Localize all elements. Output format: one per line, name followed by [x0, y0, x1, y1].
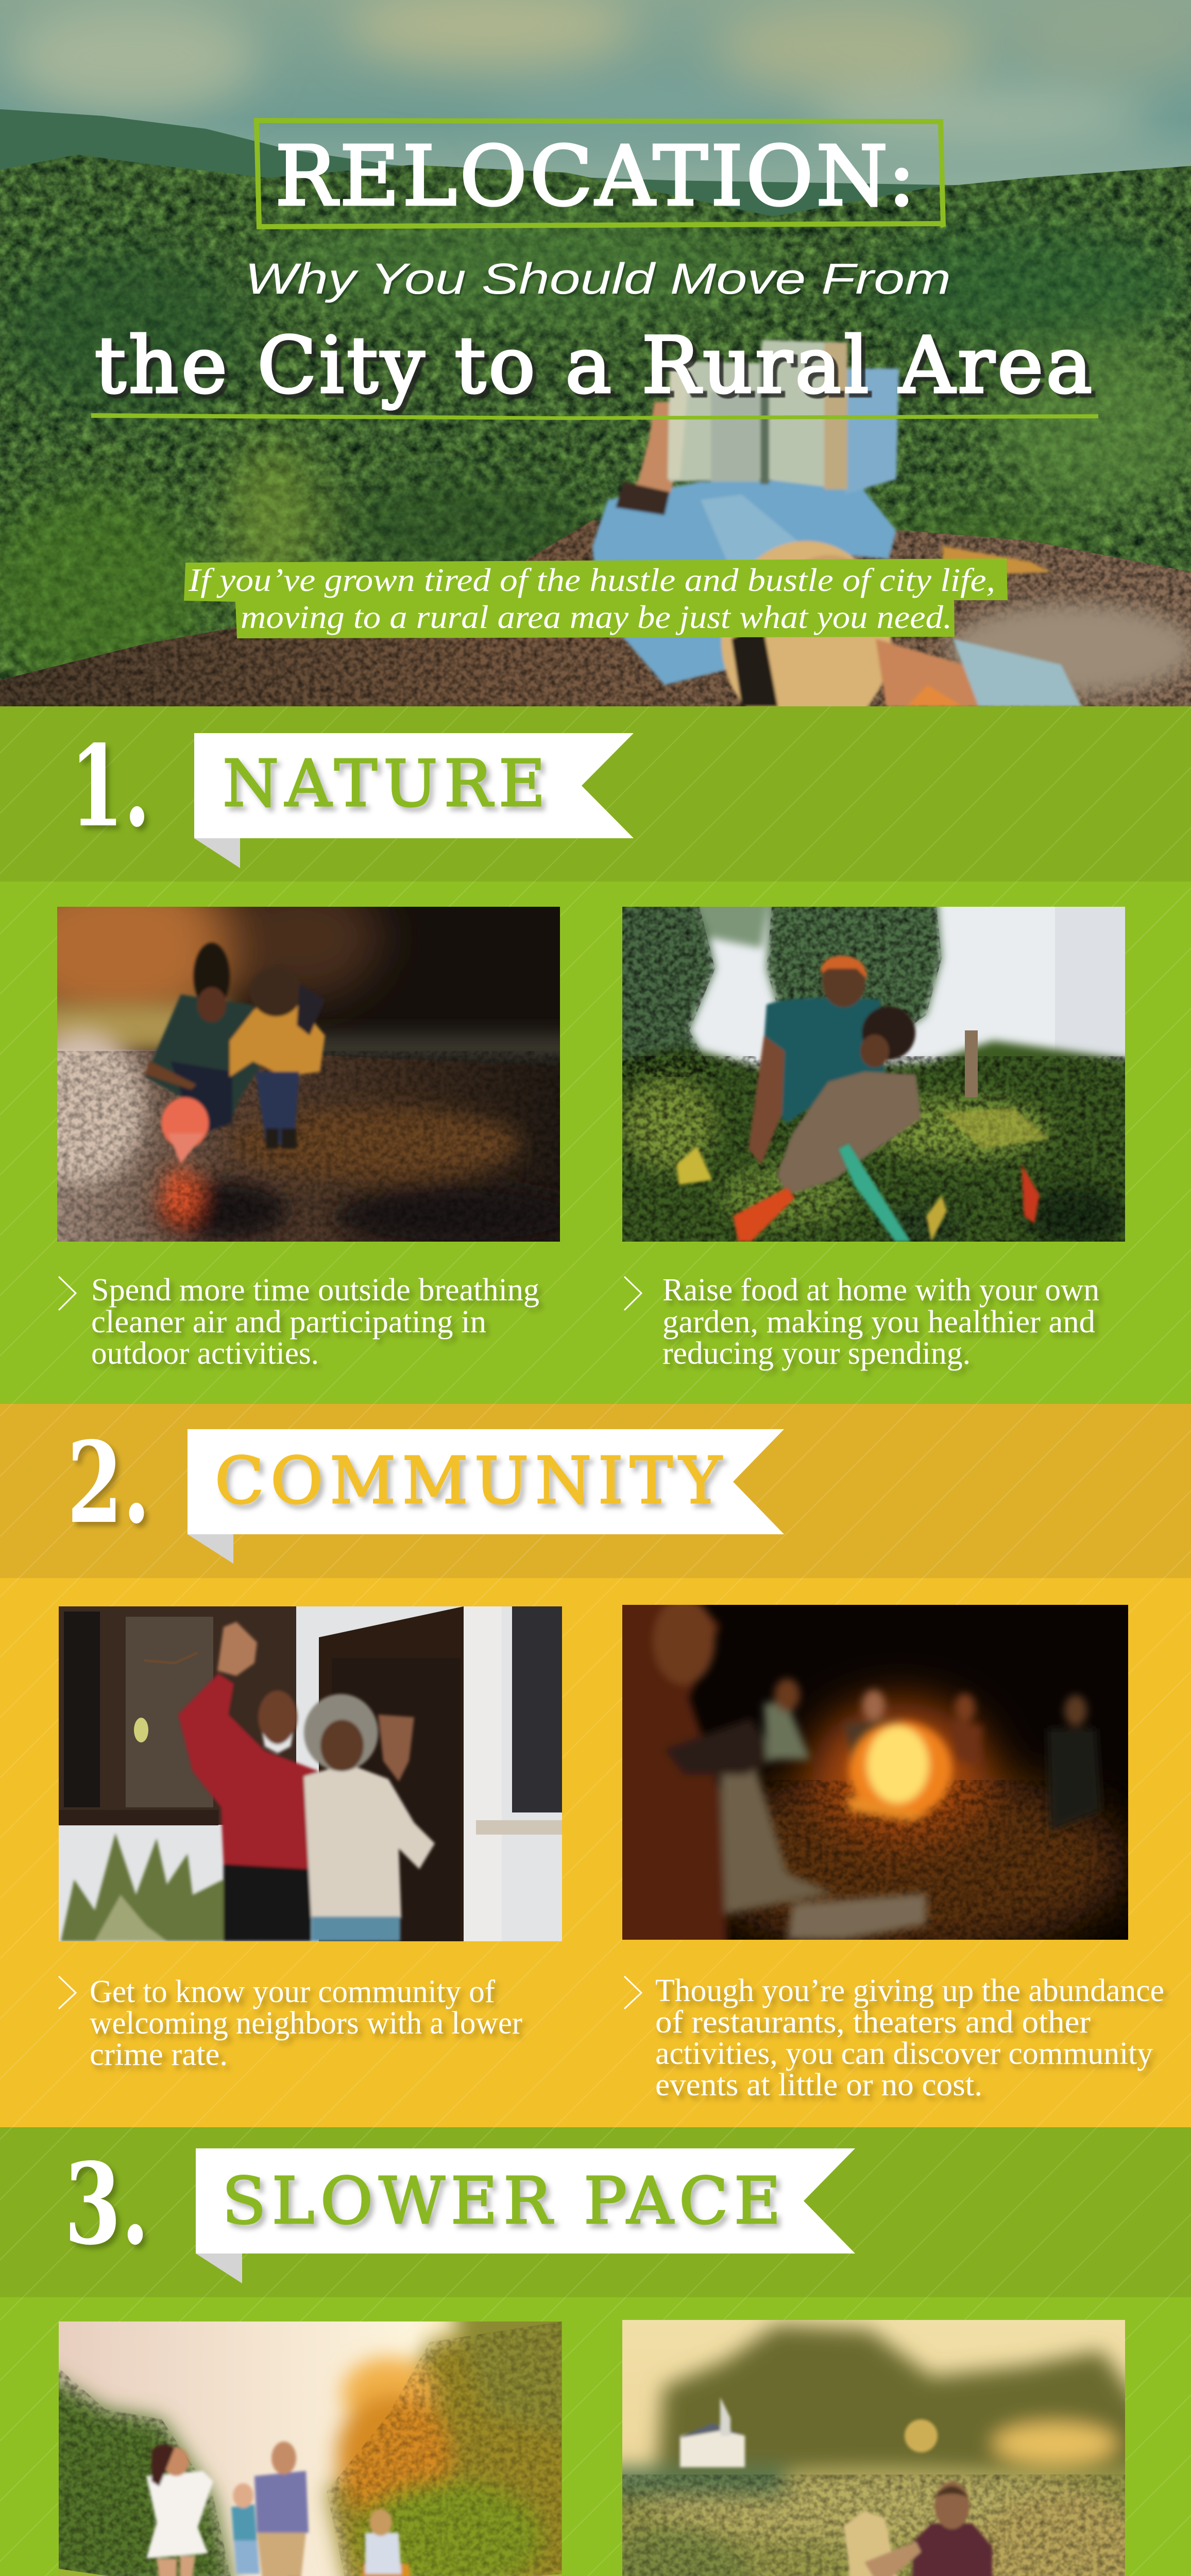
ribbon: nature: [194, 733, 634, 868]
section 2: community: [0, 1404, 1191, 2127]
bullet 2b: events at little or no cost.: [655, 2067, 982, 2103]
bullet 2a: [59, 1974, 522, 2072]
title: relocation: RELOCATION:: [275, 129, 915, 224]
hero photo: woman reading on a rock above a forest: [0, 0, 1191, 706]
bullet 2a: Get to know your community of: [90, 1974, 495, 2009]
photo: man and dog in field: [597, 2320, 1153, 2576]
bullet 2b: of restaurants, theaters and other: [655, 2005, 1091, 2040]
bullet 1b: Raise food at home with your own: [662, 1273, 1099, 1308]
bullet 1a: outdoor activities.: [91, 1336, 319, 1371]
bullet 1a: [59, 1273, 539, 1371]
bullet 2b: activities, you can discover community: [655, 2036, 1153, 2071]
bullet 1b: reducing your spending.: [662, 1336, 971, 1371]
bullet 2b: Though you’re giving up the abundance: [655, 1973, 1164, 2008]
photo: family on country road: [38, 2301, 584, 2576]
bullet 2a: welcoming neighbors with a lower: [90, 2006, 522, 2041]
ribbon: community: [188, 1429, 784, 1564]
title underline: [91, 413, 1098, 420]
bullet 2a: crime rate.: [90, 2037, 228, 2072]
ribbon: community: COMMUNITY: [215, 1444, 722, 1518]
photo: mother and son in garden: [622, 907, 1125, 1242]
photo: father and child at stream: [57, 907, 560, 1242]
bullet 1a: cleaner air and participating in: [91, 1304, 486, 1340]
ribbon: slower pace: SLOWER PACE: [222, 2164, 781, 2239]
photo: campfire at night: [622, 1605, 1128, 1940]
subtitle: Why You Should Move From: [245, 255, 951, 303]
ribbon: slower pace: [196, 2148, 855, 2283]
bullet 1a: Spend more time outside breathing: [91, 1273, 539, 1308]
title line two: the City to a Rural Area: [95, 321, 1092, 411]
number 3: 3.: [64, 2139, 149, 2270]
number 2: 2.: [67, 1417, 150, 1549]
section 3: slower pace: [0, 2127, 1191, 2576]
person: [592, 479, 896, 685]
bullet 2b: [624, 1973, 1164, 2103]
bullet 1b: [624, 1273, 1099, 1371]
photo: couple waving at door: [59, 1606, 562, 1941]
bullet 1b: garden, making you healthier and: [662, 1304, 1095, 1340]
title frame: [257, 121, 943, 227]
hero banner: [0, 0, 1191, 737]
section 1: nature: [0, 706, 1191, 1404]
number 1: 1.: [70, 721, 150, 852]
intro callout: moving to a rural area may be just what you need.: [241, 599, 952, 635]
intro callout: [184, 558, 1008, 638]
intro callout: If you’ve grown tired of the hustle and bustle of city life,: [188, 562, 995, 598]
ribbon: nature: NATURE: [223, 747, 546, 821]
